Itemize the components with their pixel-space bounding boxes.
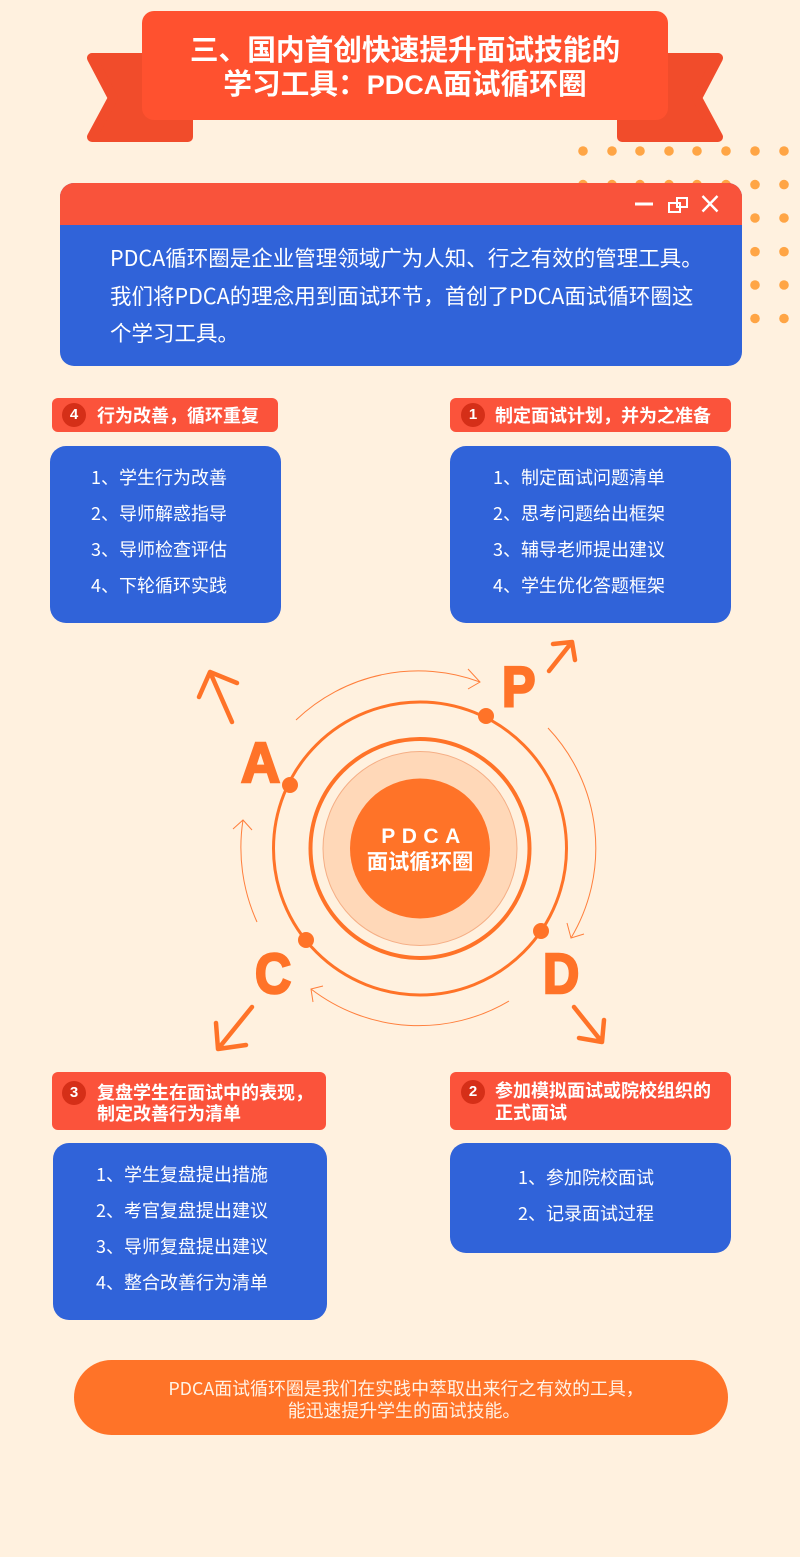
summary callout: 能迅速提升学生的面试技能。: [288, 1397, 520, 1423]
step 3 heading: [52, 1072, 326, 1130]
panel: step 2 list: 1、参加院校面试: [518, 1164, 654, 1190]
panel: step 4 list: 1、学生行为改善: [91, 464, 227, 490]
intro text: PDCA循环圈是企业管理领域广为人知、行之有效的管理工具。: [110, 242, 703, 273]
window title bar: [60, 183, 742, 225]
ribbon tails: [87, 53, 723, 142]
outer ring: [274, 702, 566, 995]
panel: step 3 list: [53, 1143, 327, 1320]
intro text: [110, 242, 703, 348]
center text: [367, 825, 473, 874]
ring dots: [282, 708, 549, 948]
core circle: [350, 778, 490, 918]
icon: window controls: [635, 195, 718, 213]
step 4 heading: 行为改善，循环重复: [97, 402, 259, 428]
summary callout: PDCA面试循环圈是我们在实践中萃取出来行之有效的工具，: [168, 1375, 644, 1401]
step 1 heading: [450, 398, 731, 432]
thin cycle arrows: [233, 669, 596, 1026]
cycle letters: [241, 655, 579, 1006]
step 1 heading: 制定面试计划，并为之准备: [495, 402, 711, 428]
panel: step 3 list: 1、学生复盘提出措施: [96, 1161, 268, 1187]
title ribbon: [87, 11, 723, 142]
cycle letters: D: [543, 942, 579, 1006]
center text: PDCA: [381, 825, 467, 848]
panel: step 3 list: 4、整合改善行为清单: [96, 1269, 268, 1295]
panel: intro window: [60, 183, 742, 366]
panel: step 2 list: 2、记录面试过程: [518, 1200, 654, 1226]
panel: step 4 list: 4、下轮循环实践: [91, 572, 227, 598]
panel: step 1 list: 2、思考问题给出框架: [493, 500, 665, 526]
big outward arrows: [199, 642, 604, 1049]
cycle letters: A: [241, 731, 280, 794]
step 2 heading: 正式面试: [495, 1099, 567, 1125]
panel: step 4 list: 3、导师检查评估: [91, 536, 227, 562]
panel: step 1 list: 4、学生优化答题框架: [493, 572, 665, 598]
step 3 heading: 制定改善行为清单: [97, 1100, 241, 1126]
pale circle: [323, 752, 517, 946]
step 2 heading: 参加模拟面试或院校组织的: [495, 1077, 711, 1103]
center text: 面试循环圈: [367, 850, 473, 874]
intro text: 我们将PDCA的理念用到面试环节，首创了PDCA面试循环圈这: [110, 280, 693, 310]
panel: step 1 list: 3、辅导老师提出建议: [493, 536, 665, 562]
ribbon banner with title: 学习工具：PDCA面试循环圈: [223, 62, 587, 103]
cycle letters: C: [255, 942, 291, 1006]
panel: step 3 list: 2、考官复盘提出建议: [96, 1197, 268, 1223]
step 4 heading: [52, 398, 278, 432]
step 3 heading: 复盘学生在面试中的表现，: [97, 1079, 313, 1105]
step 3 heading: 3: [70, 1084, 78, 1101]
ribbon banner with title: [142, 11, 668, 120]
intro text: 个学习工具。: [110, 317, 239, 348]
dot pattern: [578, 146, 789, 324]
panel: step 3 list: 3、导师复盘提出建议: [96, 1233, 268, 1259]
step 2 heading: [450, 1072, 731, 1130]
panel: step 4 list: [50, 446, 281, 623]
panel: step 1 list: [450, 446, 731, 623]
panel: step 1 list: 1、制定面试问题清单: [493, 464, 665, 490]
panel: step 2 list: [450, 1143, 731, 1253]
summary callout: [74, 1360, 728, 1435]
ribbon banner with title: 三、国内首创快速提升面试技能的: [190, 28, 620, 69]
step 1 heading: 1: [469, 406, 477, 423]
step 4 heading: 4: [70, 406, 78, 423]
panel: step 4 list: 2、导师解惑指导: [91, 500, 227, 526]
cycle letters: P: [502, 655, 535, 719]
inner ring: [310, 739, 530, 958]
step 2 heading: 2: [469, 1083, 477, 1100]
